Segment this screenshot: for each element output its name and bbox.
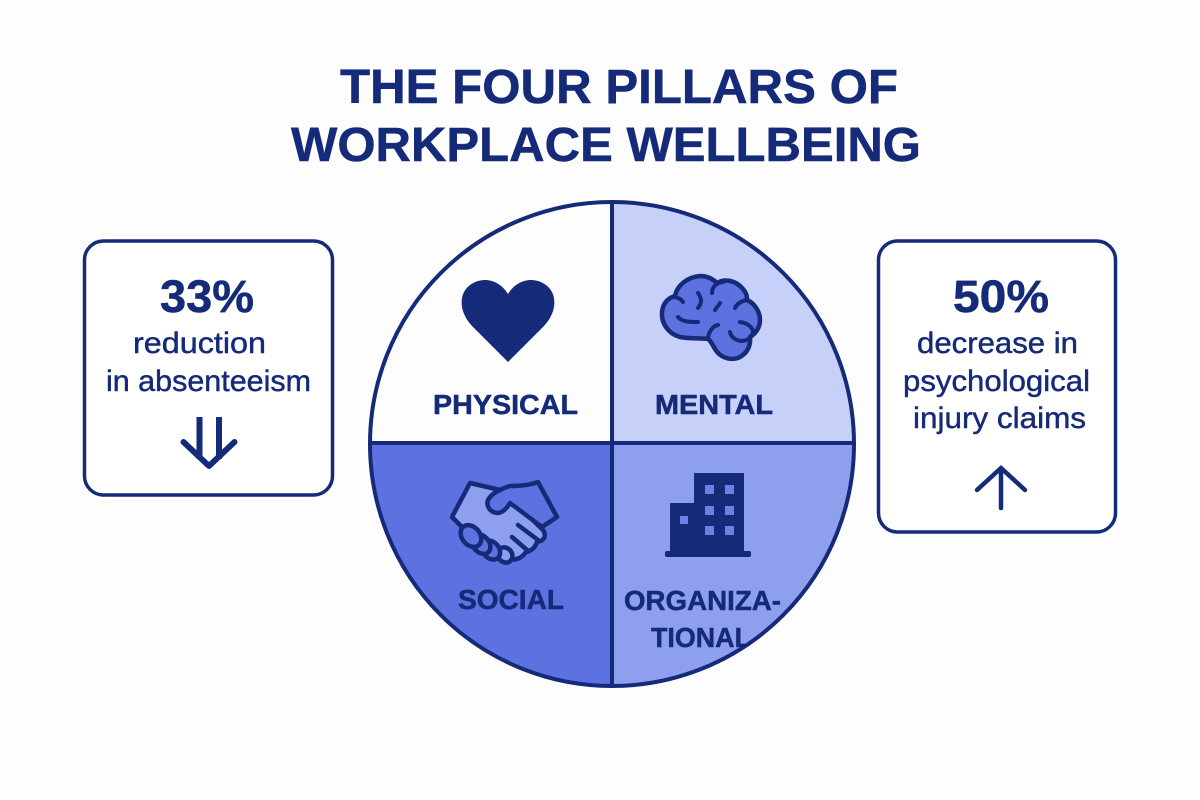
label: ORGANIZATIONAL: ORGANIZA- [624,585,781,616]
chart: four pillars circle [370,202,854,686]
panel: 33% reduction callout [84,241,332,495]
label: MENTAL: MENTAL [655,389,773,420]
icon: handshake [452,482,557,566]
quadrant: organizational [612,444,853,685]
panel: 50% decrease callout [878,241,1116,532]
label: ORGANIZATIONAL: TIONAL [651,622,751,653]
circle outline and dividers [370,202,854,686]
text: decrease in psychological injury claims: injury claims [913,402,1086,435]
text: reduction in absenteeism: in absenteeism [106,365,311,398]
title: THE FOUR PILLARS OF [340,61,898,114]
label: PHYSICAL: PHYSICAL [433,389,578,420]
text: reduction in absenteeism [106,327,311,398]
label: ORGANIZATIONAL [624,590,780,648]
icon: up arrow [977,468,1025,508]
icon: heart [462,280,554,362]
text: decrease in psychological injury claims [903,327,1090,435]
icon: brain [662,276,760,359]
title: WORKPLACE WELLBEING [291,119,921,172]
text: reduction in absenteeism: reduction [133,327,266,360]
text: decrease in psychological injury claims: psychological [903,365,1090,398]
icon: double down arrow [184,417,234,466]
text: decrease in psychological injury claims: decrease in [917,327,1078,360]
quadrant: social [371,444,612,685]
quadrant: mental [612,203,853,444]
title [291,61,921,172]
icon: office building [665,473,751,557]
stat: 50%: 50% [953,271,1049,322]
label: SOCIAL: SOCIAL [458,584,564,615]
quadrant: physical [371,203,612,444]
stat: 33%: 33% [160,271,254,322]
